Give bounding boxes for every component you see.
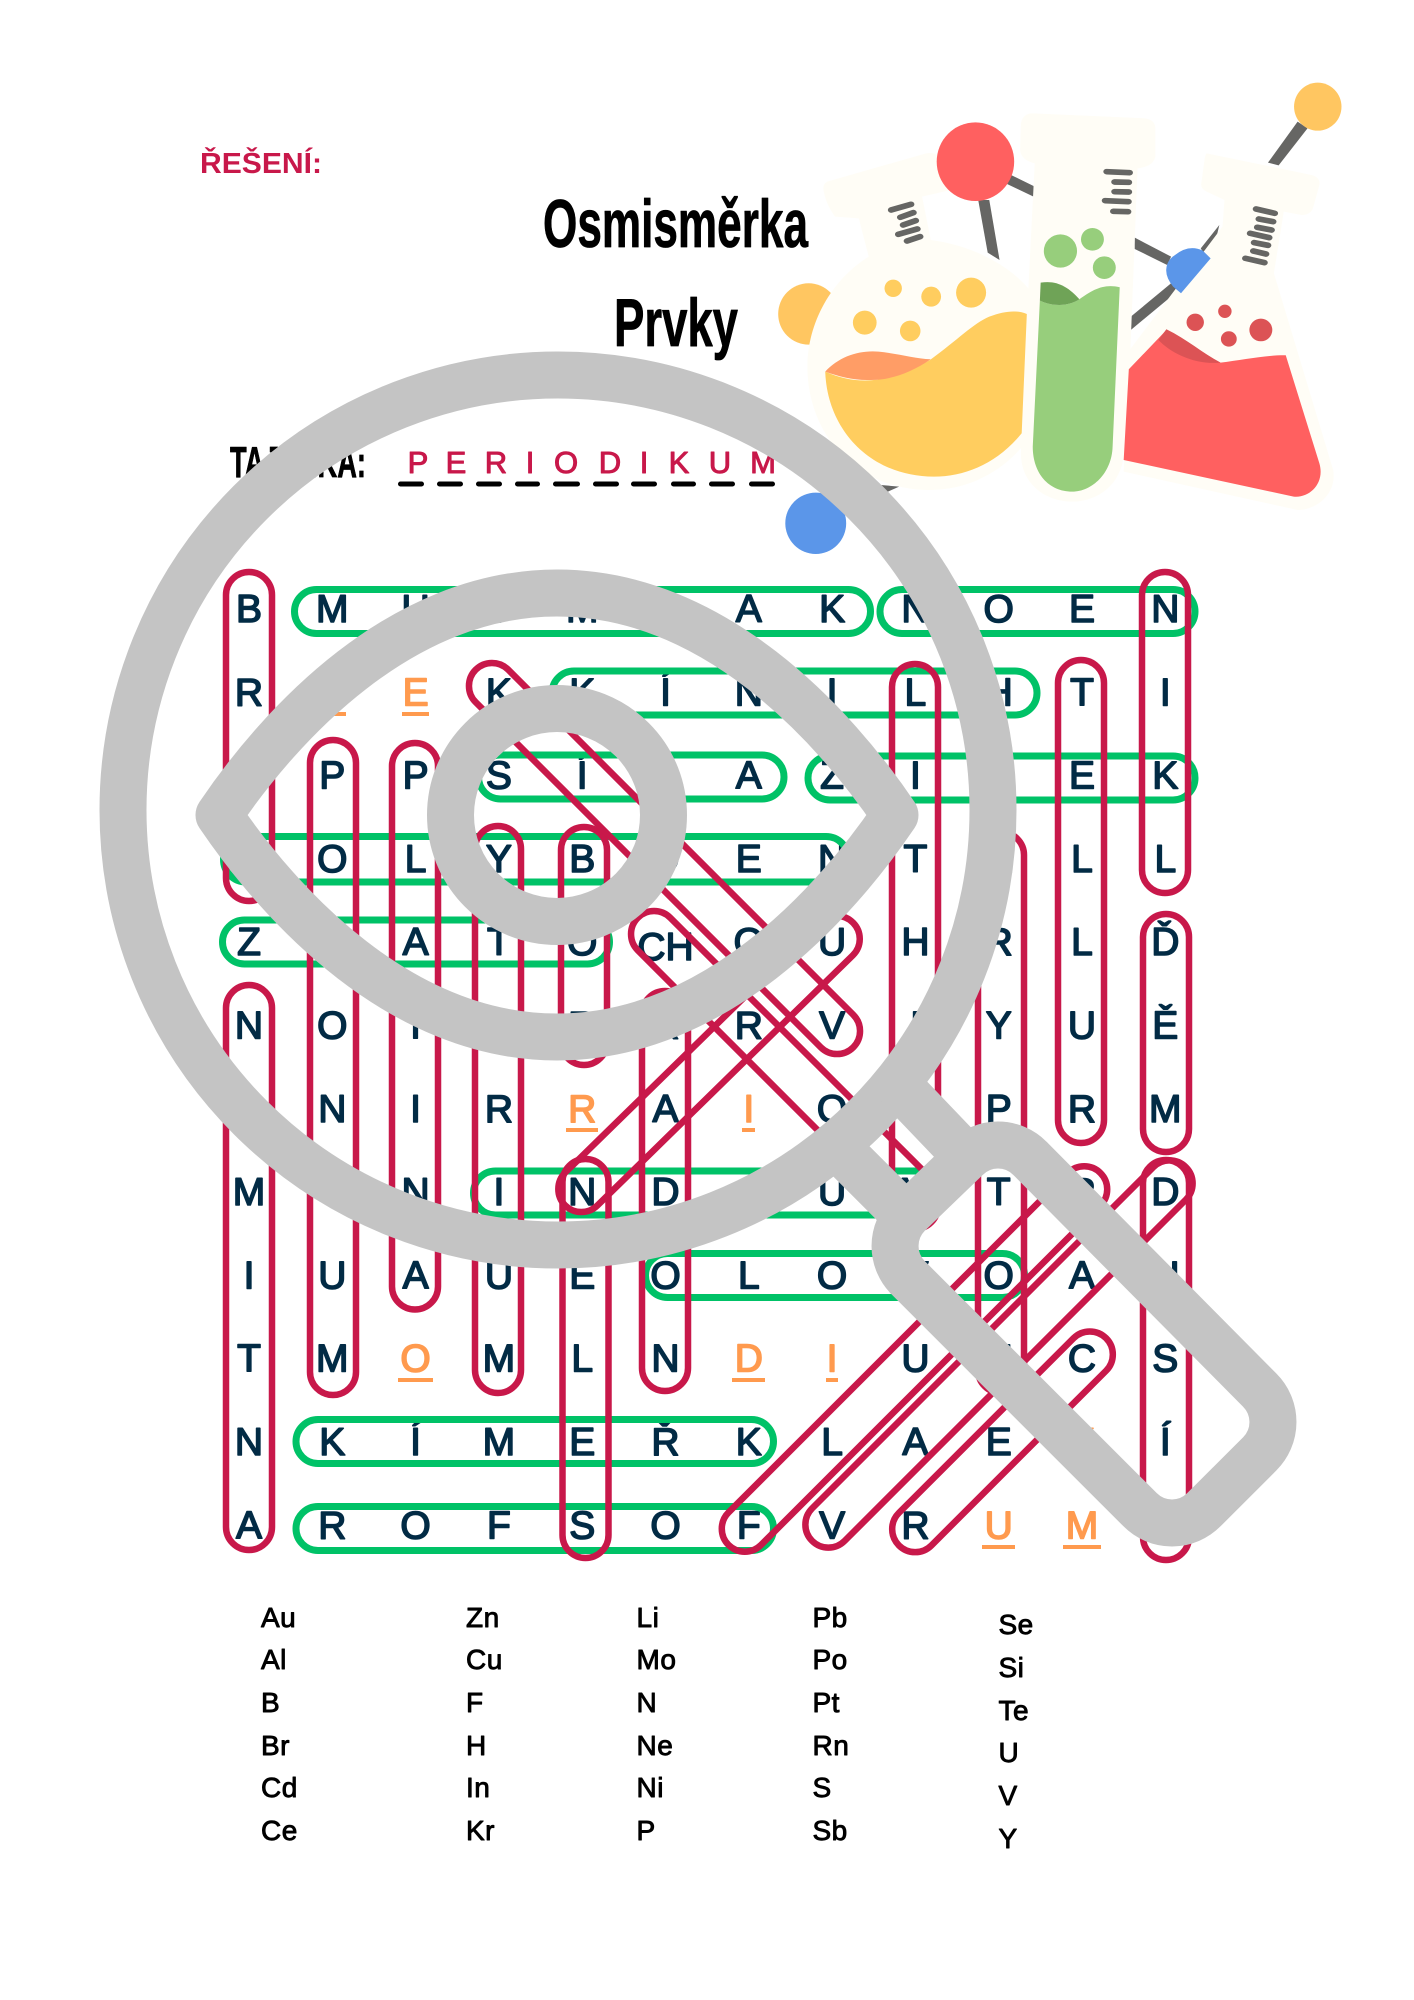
word list: column 2: Zn xyxy=(466,1602,500,1633)
label: tajenka: TAJENKA: xyxy=(230,438,366,487)
word list: column 5: V xyxy=(998,1780,1018,1811)
word list: column 5: Y xyxy=(998,1823,1018,1854)
word list: column 3: Ne xyxy=(636,1730,673,1761)
word list: column 1: B xyxy=(261,1687,280,1718)
word search: letter grid: NKÍMEŘKLAEÍ xyxy=(235,1421,1171,1464)
word search: letter grid: ZLATOOUHRLĎ xyxy=(237,921,1179,964)
word list: column 4: Sb xyxy=(812,1815,848,1846)
word list: column 5: Te xyxy=(998,1695,1029,1726)
glass flask bodies xyxy=(807,113,1334,510)
molecule ball: red xyxy=(937,122,1014,201)
word search: letter grid xyxy=(233,588,1182,1547)
word list: column 3: N xyxy=(636,1687,657,1718)
word search: letter grid: OPPSÍRAZINEK xyxy=(234,755,1178,798)
word list: column 5: Si xyxy=(998,1652,1024,1683)
word list: column 4: Rn xyxy=(812,1730,849,1761)
eye outline xyxy=(219,593,895,1037)
highlighted tajenka letters: UM xyxy=(985,1504,1098,1547)
word search: letter grid: BMUIMDAKNOEN xyxy=(236,588,1179,631)
green liquid xyxy=(1033,228,1120,492)
handle xyxy=(895,1145,1273,1523)
answer: periodikum letters: PERIODIKUM xyxy=(408,445,776,480)
word list: column 4: Pt xyxy=(812,1687,840,1718)
word search: letter grid: RKKÍNILHTI xyxy=(235,671,1171,714)
icon: magnifying glass with eye xyxy=(123,375,1273,1523)
title: Prvky: Prvky xyxy=(614,285,738,361)
word list: column 5: Se xyxy=(998,1609,1034,1640)
highlighted tajenka letters xyxy=(318,671,1101,1547)
molecule balls behind flasks xyxy=(778,83,1341,554)
word list: column 4 xyxy=(812,1602,849,1846)
highlighted tajenka letters: PE xyxy=(319,671,429,714)
highlighted tajenka letters: ODI xyxy=(400,1338,838,1381)
illustration: chemistry flasks and molecule xyxy=(778,83,1341,554)
word search: letter grid: MOLYBDENTKLL xyxy=(233,838,1176,881)
word list: column 3 xyxy=(636,1602,676,1846)
word list: column 3: Li xyxy=(636,1602,659,1633)
word search: letter grid: MININDIUMTRD xyxy=(233,1171,1179,1214)
word list: column 2: In xyxy=(466,1772,490,1803)
word list: column 3: Mo xyxy=(636,1644,676,1675)
molecule rods xyxy=(881,122,1307,492)
word list: column 2: Kr xyxy=(466,1815,495,1846)
word list: column 1: Al xyxy=(261,1644,287,1675)
heading: solution label: ŘEŠENÍ: xyxy=(200,146,322,180)
title: Osmisměrka: Osmisměrka xyxy=(543,186,809,262)
eye iris xyxy=(450,708,664,922)
red liquid xyxy=(1124,305,1321,497)
word list: column 1 xyxy=(261,1602,298,1846)
red word outlines xyxy=(226,572,1202,1562)
word search: letter grid: CH xyxy=(637,926,694,969)
molecule ball: blue half xyxy=(1166,248,1211,293)
lens ring xyxy=(123,375,993,1245)
measuring ticks xyxy=(891,172,1275,263)
word list: column 1: Br xyxy=(261,1730,290,1761)
word search: letter grid: AROFSOFVRK xyxy=(236,1504,1178,1547)
word list: column 1: Cd xyxy=(261,1772,298,1803)
word list: column 3: Ni xyxy=(636,1772,664,1803)
word list: column 5: U xyxy=(998,1737,1019,1768)
word search: letter grid: NOTTRRRVIYUĚ xyxy=(235,1004,1178,1048)
word list: column 2: Cu xyxy=(466,1644,503,1675)
word list: column 2: F xyxy=(466,1687,484,1718)
word list: column 2: H xyxy=(466,1730,487,1761)
word list: column 1: Au xyxy=(261,1602,296,1633)
highlighted tajenka letters: RI xyxy=(568,1088,754,1131)
highlighted tajenka letters: K xyxy=(1069,1421,1095,1464)
word list: column 4: S xyxy=(812,1772,832,1803)
word list: column 5 xyxy=(998,1609,1034,1854)
word search: letter grid: ONIRAOUPRM xyxy=(234,1088,1182,1131)
yellow liquid xyxy=(825,278,1027,477)
word list: column 2 xyxy=(466,1602,503,1846)
word list: column 4: Po xyxy=(812,1644,848,1675)
green word outlines xyxy=(222,590,1195,1550)
word search: letter grid: IUAUEOLOVOAU xyxy=(244,1254,1179,1297)
word list: column 1: Ce xyxy=(261,1815,298,1846)
word search: letter grid: TMMLNUNCS xyxy=(237,1338,1178,1381)
word list: column 3: P xyxy=(636,1815,656,1846)
word list: column 4: Pb xyxy=(812,1602,848,1633)
handle connector xyxy=(830,1082,960,1205)
